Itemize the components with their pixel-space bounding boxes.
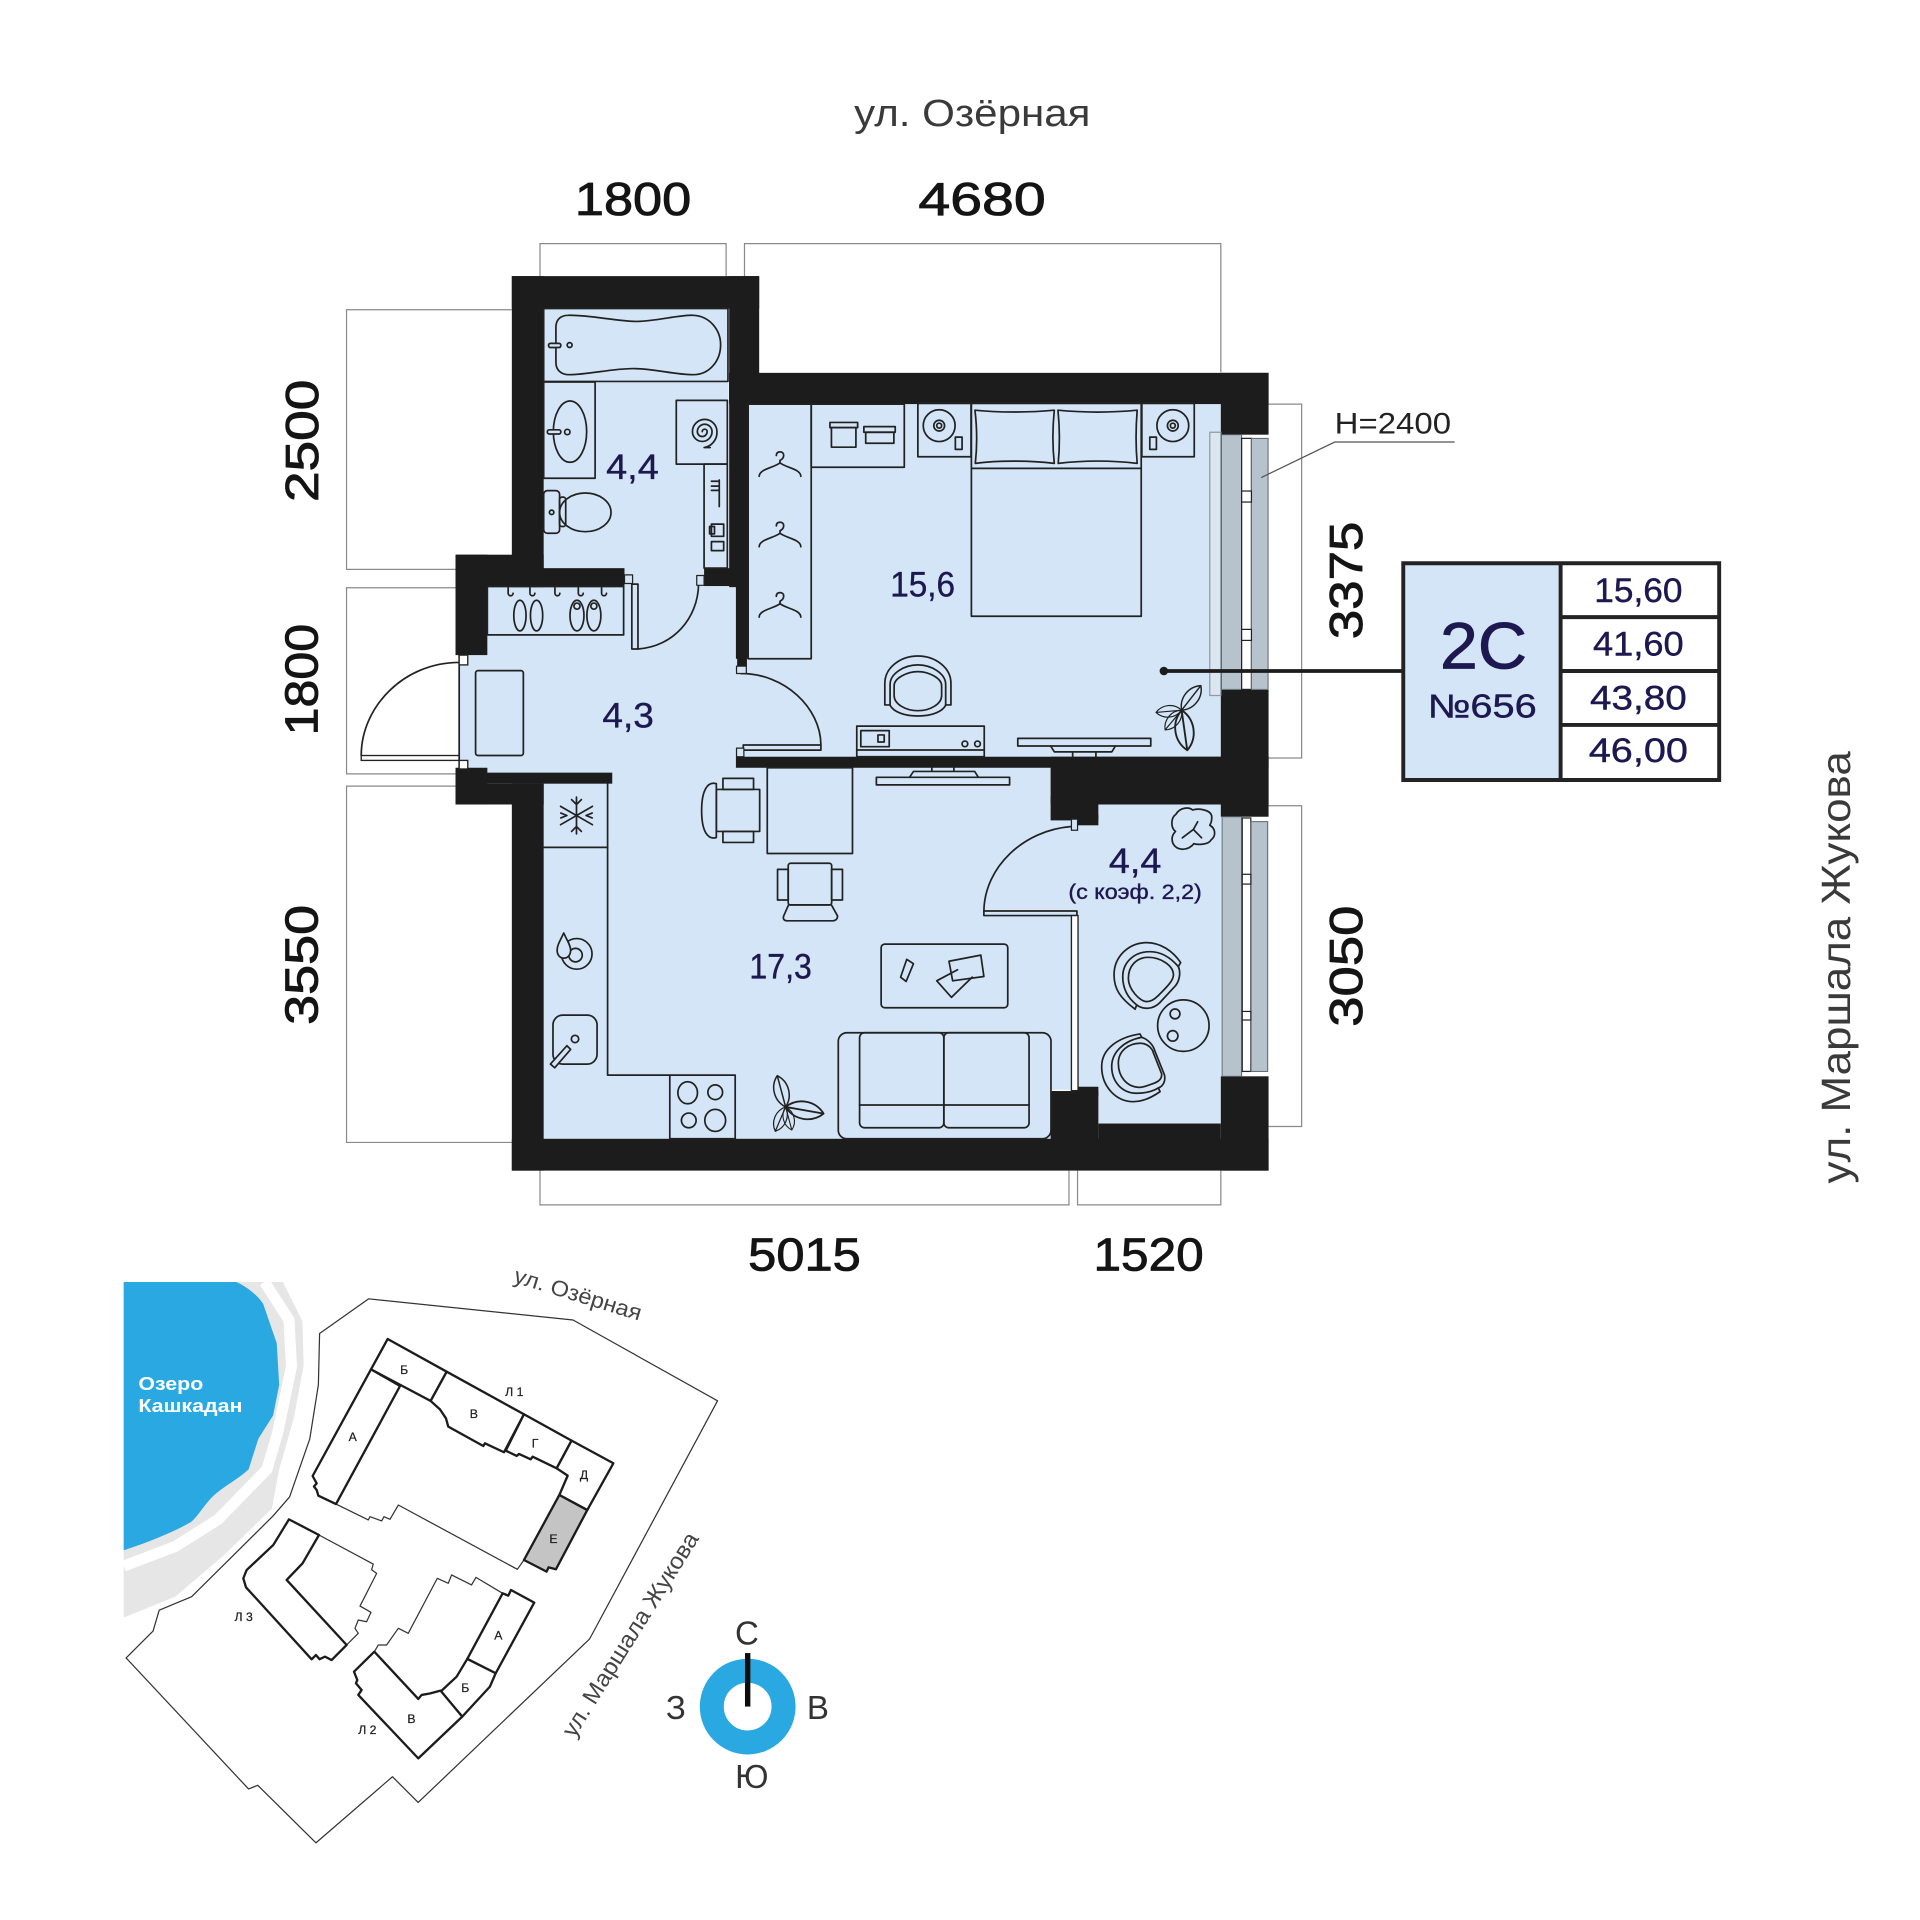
room areas bbox=[602, 447, 1202, 986]
lake label: Кашкадан bbox=[138, 1395, 242, 1416]
floor plan bbox=[361, 276, 1269, 1171]
bedroom plant bbox=[1156, 681, 1206, 751]
icon: fridge snowflake bbox=[561, 797, 592, 834]
site plan building labels: А bbox=[494, 1629, 503, 1643]
compass letters: З bbox=[666, 1690, 686, 1727]
washbasin bbox=[544, 382, 595, 478]
door: balcony bbox=[984, 819, 1078, 1091]
hall cabinet bbox=[476, 671, 523, 756]
apartment number: №656 bbox=[1428, 689, 1537, 726]
window: bedroom bbox=[1210, 432, 1268, 696]
building L3 bbox=[243, 1519, 377, 1660]
balcony table bbox=[1158, 1000, 1209, 1051]
site plan building labels: Л 2 bbox=[358, 1723, 377, 1737]
street label: Marshala Zhukova: ул. Маршала Жукова bbox=[1813, 751, 1859, 1183]
bathtub bbox=[544, 309, 728, 381]
apartment type: 2С bbox=[1440, 610, 1527, 684]
bedroom TV bbox=[1018, 738, 1151, 757]
site plan building labels: Л 1 bbox=[505, 1385, 524, 1399]
summary table bbox=[1403, 563, 1719, 780]
compass bbox=[666, 1615, 829, 1796]
lake bbox=[124, 1282, 279, 1550]
bedroom desk bbox=[857, 726, 984, 757]
balcony chair: upper bbox=[1114, 943, 1181, 1009]
living room TV bbox=[876, 768, 1010, 785]
room areas: 17,3 bbox=[749, 946, 812, 986]
compass ring bbox=[712, 1671, 784, 1742]
dimension labels bbox=[276, 173, 1372, 1280]
site plan building labels: Б bbox=[400, 1363, 408, 1377]
dimension labels: 1800 bbox=[575, 173, 691, 225]
site plan building labels: Б bbox=[461, 1681, 469, 1695]
window: balcony bbox=[1222, 817, 1268, 1076]
table values: 43,80 bbox=[1590, 680, 1687, 718]
site plan building labels: В bbox=[407, 1712, 416, 1726]
dimension extension lines bbox=[347, 244, 1302, 1205]
room areas: 4,4 bbox=[606, 447, 659, 487]
table grid bbox=[1403, 563, 1719, 780]
toilet bbox=[544, 491, 611, 533]
compass letters: С bbox=[735, 1615, 759, 1652]
balcony furniture bbox=[1102, 808, 1215, 1102]
dimension labels: 1520 bbox=[1093, 1228, 1204, 1280]
compass letters: В bbox=[807, 1690, 829, 1727]
dimension labels: 3050 bbox=[1320, 906, 1372, 1027]
site street label: Ozernaya: ул. Озёрная bbox=[511, 1263, 645, 1325]
bedroom armchair bbox=[885, 656, 951, 716]
building L2 bbox=[354, 1575, 534, 1758]
balcony chair: lower bbox=[1102, 1034, 1165, 1102]
dimension labels: 4680 bbox=[918, 173, 1046, 225]
door: bedroom bbox=[737, 666, 821, 757]
icon: balcony tree bbox=[1172, 808, 1215, 849]
room areas: 4,4 bbox=[1109, 841, 1161, 881]
promenade stripe bbox=[124, 1282, 291, 1566]
ceiling height callout: H=2400 bbox=[1335, 407, 1451, 440]
coffee table with papers bbox=[881, 944, 1008, 1008]
site plan building labels: В bbox=[470, 1407, 478, 1421]
table values bbox=[1589, 572, 1688, 770]
ceiling height callout bbox=[1261, 407, 1455, 478]
lake shore band bbox=[124, 1282, 304, 1618]
building L1 bbox=[313, 1339, 613, 1572]
kitchen counter bbox=[544, 784, 735, 1139]
lake label bbox=[138, 1373, 242, 1416]
site plan building labels: А bbox=[349, 1430, 358, 1444]
room areas: 15,6 bbox=[890, 564, 955, 604]
dimension labels: 3375 bbox=[1320, 522, 1372, 639]
room areas: 4,3 bbox=[602, 695, 654, 735]
apartment floor fill bbox=[459, 309, 1221, 1139]
dimension labels: 5015 bbox=[748, 1228, 861, 1280]
dimension labels: 1800 bbox=[276, 624, 328, 735]
street label: Ozernaya: ул. Озёрная bbox=[854, 93, 1090, 135]
site plan bbox=[124, 1263, 718, 1843]
table values: 41,60 bbox=[1593, 626, 1684, 664]
compass needle bbox=[745, 1653, 750, 1707]
icon: water and dishwasher bbox=[557, 933, 592, 969]
sofa bbox=[838, 1033, 1051, 1139]
table values: 46,00 bbox=[1589, 732, 1688, 770]
lake label: Озеро bbox=[138, 1373, 203, 1394]
site boundary bbox=[126, 1299, 718, 1843]
dining table with chairs bbox=[702, 768, 852, 921]
bed with nightstands bbox=[918, 403, 1194, 616]
site street label: Marshala Zhukova: ул. Маршала Жукова bbox=[556, 1527, 704, 1741]
living room plant bbox=[770, 1074, 825, 1134]
dimension labels: 3550 bbox=[276, 905, 328, 1025]
shelf with towel rail bbox=[704, 464, 727, 568]
table values: 15,60 bbox=[1594, 572, 1682, 610]
door: bathroom bbox=[624, 575, 704, 649]
site plan building labels: Д bbox=[580, 1468, 589, 1482]
site plan building labels: Е bbox=[549, 1532, 558, 1546]
storage unit with boxes bbox=[811, 404, 904, 467]
site plan building labels: Л 3 bbox=[235, 1610, 253, 1624]
hob bbox=[670, 1075, 735, 1139]
shoe shelf bbox=[487, 587, 624, 635]
dimension labels: 2500 bbox=[1162, 503, 1214, 621]
icon: kitchen sink bbox=[550, 1015, 597, 1068]
dimension labels: 2500 bbox=[276, 380, 328, 502]
walls bbox=[456, 276, 1269, 1171]
pointer line from plan to summary table bbox=[1160, 667, 1403, 675]
bathroom fixtures bbox=[544, 309, 728, 568]
room areas: (с коэф. 2,2) bbox=[1068, 881, 1202, 904]
compass letters: Ю bbox=[735, 1759, 769, 1796]
washing machine bbox=[676, 400, 727, 464]
compass letters bbox=[666, 1615, 829, 1796]
site plan building labels bbox=[235, 1363, 589, 1737]
wardrobe with hangers bbox=[748, 404, 811, 659]
site plan building labels: Г bbox=[532, 1436, 539, 1450]
door: entrance bbox=[361, 655, 468, 769]
table type cell bbox=[1403, 563, 1560, 780]
